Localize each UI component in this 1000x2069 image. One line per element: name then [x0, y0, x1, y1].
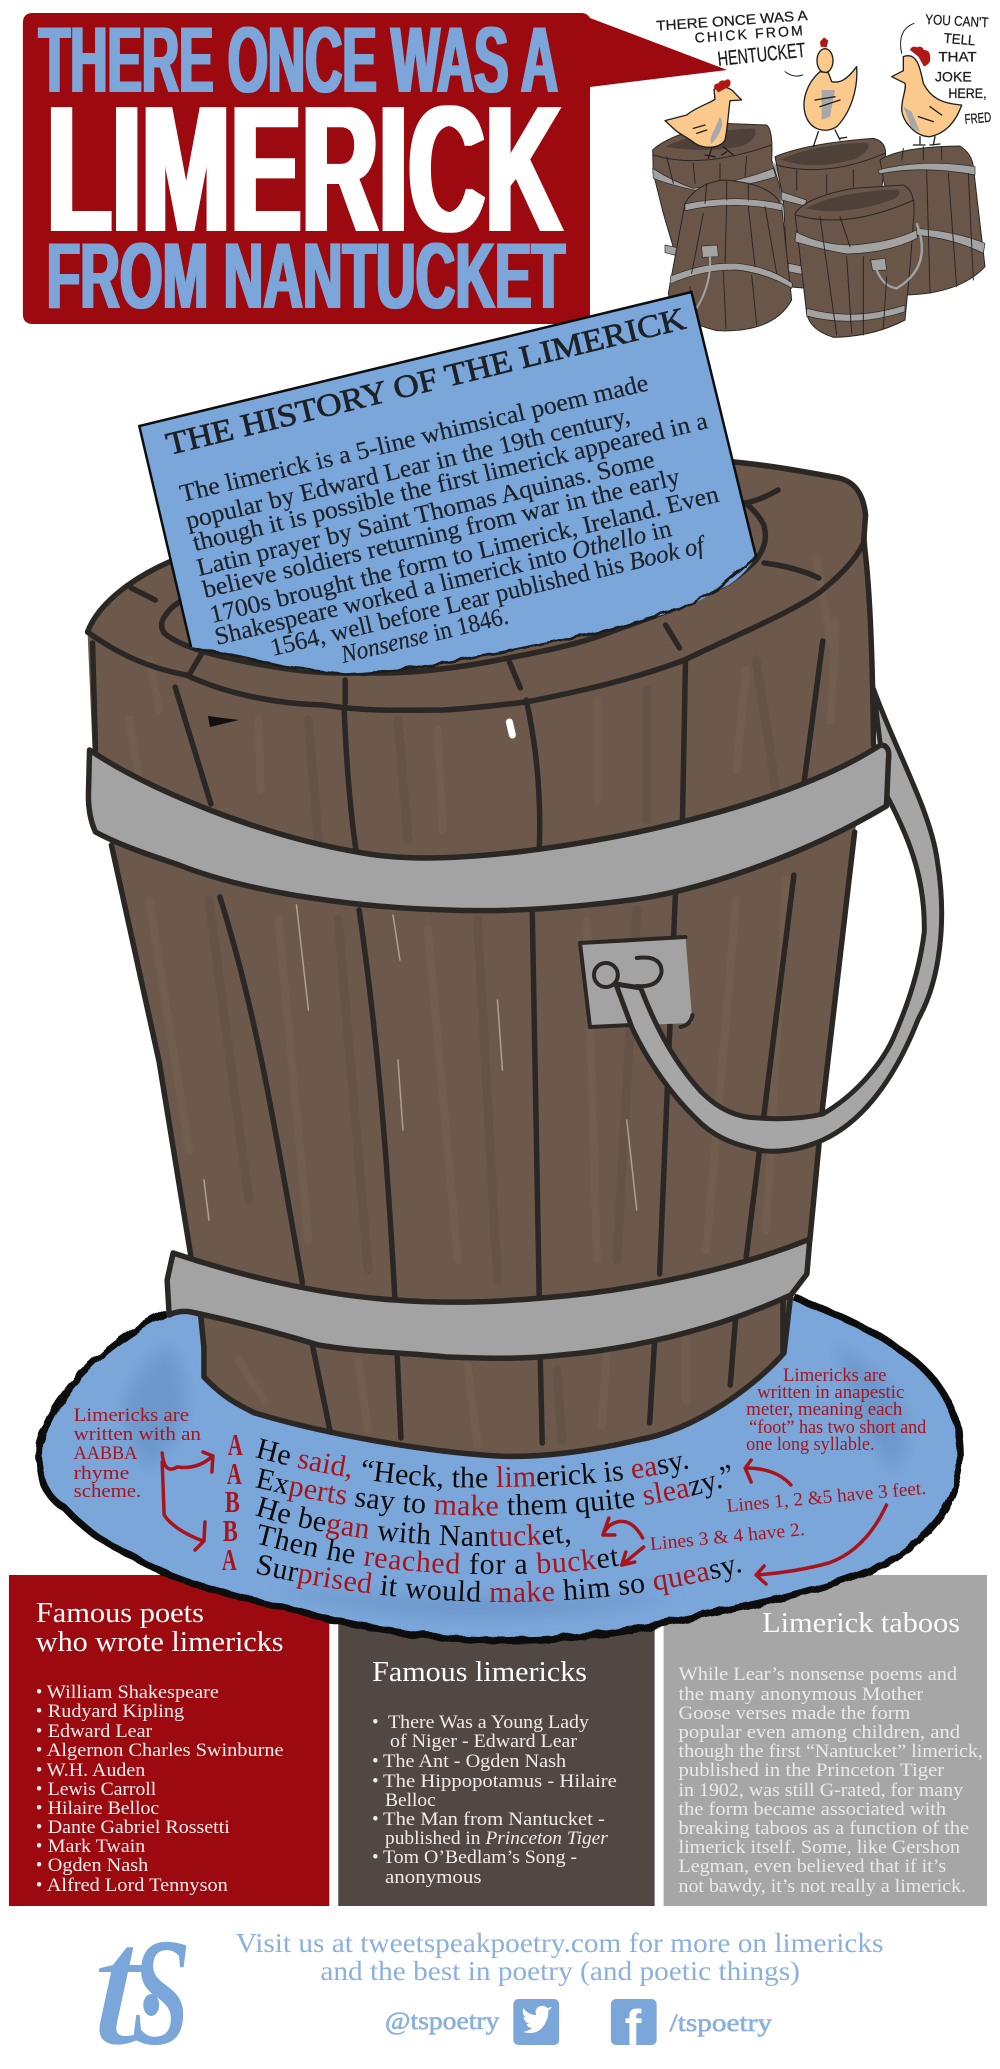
- poet list: Alfred Lord Tennyson: [47, 1875, 228, 1895]
- poem: Experts say to make them quite sleazy.”: [255, 1464, 730, 1518]
- title line 1: THERE ONCE WAS A: [39, 7, 558, 112]
- annotation: rhyme scheme: rhyme: [74, 1463, 129, 1484]
- heading: Limerick taboos: [762, 1608, 960, 1639]
- annotation: rhyme scheme: written with an: [74, 1424, 202, 1445]
- annotation: lines 1, 2 and 5: Lines 1, 2 &5 have 3 feet.: [726, 1478, 927, 1517]
- twitter handle: @tspoetry: [385, 2008, 500, 2035]
- body text: the form became associated with: [679, 1799, 946, 1819]
- facebook handle: /tspoetry: [670, 2010, 773, 2037]
- rhyme scheme letters: A: [222, 1542, 237, 1577]
- body text: Goose verses made the form: [679, 1703, 911, 1723]
- speech: You can't tell that joke here, Fred: HERE,: [948, 85, 987, 101]
- rhyme scheme letters: [222, 1427, 243, 1577]
- speech: There once was a chick from Hentucket: CHICK FROM: [694, 22, 803, 46]
- body text: the many anonymous Mother: [679, 1684, 923, 1704]
- limerick list: Tom O’Bedlam’s Song -: [383, 1847, 577, 1867]
- top band: [88, 745, 889, 911]
- poem: [255, 1438, 741, 1602]
- poet list: •: [36, 1836, 42, 1856]
- arrows: rhyme scheme: [162, 1452, 213, 1550]
- rhyme scheme letters: A: [227, 1456, 242, 1491]
- annotation: rhyme scheme: Limericks are: [74, 1405, 189, 1426]
- poet list: •: [36, 1721, 42, 1741]
- bucket: front left: [668, 180, 793, 331]
- limerick list: •: [372, 1771, 379, 1791]
- limerick list: There Was a Young Lady: [388, 1712, 590, 1732]
- paper body text: [177, 370, 722, 669]
- illustration: chickens on buckets: [653, 7, 992, 337]
- poet list: •: [36, 1779, 42, 1799]
- title line 2: LIMERICK: [47, 69, 562, 270]
- body text: published in the Princeton Tiger: [679, 1760, 944, 1780]
- limerick list: The Ant - Ogden Nash: [383, 1751, 566, 1771]
- limerick list: The Hippopotamus - Hilaire: [383, 1771, 617, 1791]
- body text: not bawdy, it’s not really a limerick.: [679, 1876, 966, 1896]
- limerick list: •: [372, 1809, 379, 1829]
- limerick list: •: [372, 1712, 379, 1732]
- speech: There once was a chick from Hentucket: [656, 7, 809, 76]
- heading: Famous poets: [36, 1598, 204, 1629]
- annotation: anapestic meter: “foot” has two short and: [749, 1417, 927, 1438]
- paper body text: The limerick is a 5-line whimsical poem made: [177, 370, 651, 508]
- annotation: anapestic meter: Limericks are: [783, 1365, 886, 1386]
- poem: He began with Nantucket,: [255, 1496, 570, 1548]
- panel: limerick taboos: [664, 1575, 987, 1906]
- icon: facebook: [611, 1999, 657, 2056]
- rhyme scheme letters: B: [225, 1484, 240, 1519]
- poet list: •: [36, 1682, 42, 1702]
- poet list: •: [36, 1701, 42, 1721]
- annotation: rhyme scheme: [74, 1405, 202, 1502]
- panel: famous poets: [9, 1575, 329, 1906]
- title speech bubble: [23, 7, 727, 328]
- bucket outline: [93, 540, 874, 1456]
- body text: popular even among children, and: [679, 1722, 960, 1742]
- poet list: Mark Twain: [48, 1836, 145, 1856]
- bucket: back left: [653, 123, 787, 270]
- paper body text: Nonsense in 1846.: [337, 603, 511, 669]
- speech: You can't tell that joke here, Fred: THAT: [938, 48, 977, 64]
- annotation: rhyme scheme: scheme.: [74, 1481, 141, 1502]
- annotation: anapestic meter: meter, meaning each: [746, 1399, 903, 1420]
- wood streaks: [129, 560, 836, 1445]
- poet list: William Shakespeare: [47, 1682, 219, 1702]
- limerick list: of Niger - Edward Lear: [390, 1731, 577, 1751]
- chicken: middle: [804, 37, 857, 147]
- limerick list: Belloc: [385, 1790, 436, 1810]
- footer message: and the best in poetry (and poetic things): [320, 1956, 800, 1986]
- poem: Surprised it would make him so queasy.: [256, 1555, 741, 1602]
- heading: [36, 1598, 284, 1658]
- bucket: front right: [795, 185, 922, 337]
- speech: You can't tell that joke here, Fred: YOU CAN'T: [925, 11, 989, 30]
- paper body text: 1564, well before Lear published his Book of: [268, 531, 710, 662]
- arrows: meter: [603, 1460, 886, 1584]
- icon: facebook: f: [625, 2000, 642, 2056]
- speech: You can't tell that joke here, Fred: JOKE: [935, 69, 972, 85]
- speech: You can't tell that joke here, Fred: TELL: [943, 30, 976, 48]
- panel: famous limericks: [338, 1610, 655, 1906]
- poet list: [36, 1682, 284, 1895]
- footer message: [236, 1928, 883, 1986]
- paper heading: THE HISTORY OF THE LIMERICK: [163, 301, 689, 462]
- limerick list: The Man from Nantucket -: [383, 1809, 605, 1829]
- limerick list: anonymous: [385, 1867, 482, 1887]
- heading: who wrote limericks: [36, 1627, 284, 1658]
- small nail mark: [208, 716, 239, 727]
- limerick list: published in Princeton Tiger: [385, 1828, 609, 1848]
- annotation: anapestic meter: written in anapestic: [757, 1382, 904, 1403]
- body text: [679, 1664, 983, 1896]
- title line 3: FROM NANTUCKET: [47, 223, 565, 328]
- poem: He said, “Heck, the limerick is easy.: [256, 1438, 688, 1492]
- big bucket: [88, 450, 942, 1456]
- poet list: Edward Lear: [48, 1721, 152, 1741]
- poet list: Lewis Carroll: [48, 1779, 156, 1799]
- footer message: Visit us at tweetspeakpoetry.com for more on limericks: [236, 1928, 883, 1958]
- annotation: rhyme scheme: AABBA: [74, 1443, 138, 1464]
- poet list: Dante Gabriel Rossetti: [48, 1817, 230, 1837]
- blue puddle: [39, 1280, 960, 1640]
- speech: There once was a chick from Hentucket: HENTUCKET: [716, 39, 807, 71]
- poet list: Rudyard Kipling: [48, 1701, 184, 1721]
- poet list: W.H. Auden: [47, 1760, 145, 1780]
- footer: ts logo: [90, 1853, 191, 2069]
- body text: Legman, even believed that if it’s: [679, 1856, 946, 1876]
- body text: in 1902, was still G-rated, for many: [679, 1780, 964, 1800]
- bucket: back middle: [775, 138, 886, 288]
- speech: You can't tell that joke here, Fred: [901, 11, 992, 127]
- heading: Famous limericks: [372, 1657, 587, 1688]
- limerick list: •: [372, 1847, 379, 1867]
- handle plate: [580, 937, 692, 1027]
- bucket rim: [88, 462, 866, 710]
- paper body text: believe soldiers returning from war in the early: [200, 463, 683, 604]
- poet list: •: [36, 1875, 42, 1895]
- poet list: •: [36, 1855, 42, 1875]
- body text: limerick itself. Some, like Gershon: [679, 1837, 960, 1857]
- rhyme scheme letters: A: [228, 1427, 243, 1462]
- stave lines: [175, 641, 823, 1443]
- rhyme scheme letters: B: [223, 1513, 238, 1548]
- poet list: •: [36, 1817, 42, 1837]
- annotation: anapestic meter: one long syllable.: [746, 1434, 875, 1455]
- speech: There once was a chick from Hentucket: THERE ONCE WAS A: [656, 7, 809, 34]
- chicken: left: [665, 79, 742, 158]
- paper body text: popular by Edward Lear in the 19th century,: [183, 402, 633, 535]
- poet list: •: [36, 1760, 42, 1780]
- paper body text: 1700s brought the form to Limerick, Ireland. Even: [207, 481, 722, 629]
- body text: breaking taboos as a function of the: [679, 1818, 969, 1838]
- limerick list: [372, 1712, 617, 1887]
- annotation: lines 3 and 4: Lines 3 & 4 have 2.: [649, 1519, 806, 1555]
- paper body text: Shakespeare worked a limerick into Othello in: [212, 515, 675, 651]
- chicken: right: [892, 47, 962, 145]
- body text: though the first “Nantucket” limerick,: [679, 1741, 983, 1761]
- annotation: anapestic meter: [746, 1365, 927, 1455]
- paper body text: though it is possible the first limerick appeared in a: [190, 407, 710, 557]
- bucket handle: [616, 689, 942, 1151]
- poet list: Ogden Nash: [48, 1855, 148, 1875]
- limerick list: •: [372, 1751, 379, 1771]
- poet list: •: [36, 1798, 42, 1818]
- poet list: Algernon Charles Swinburne: [47, 1740, 284, 1760]
- bottom band: [167, 1239, 810, 1358]
- history paper: [139, 292, 756, 674]
- body text: While Lear’s nonsense poems and: [679, 1664, 957, 1684]
- poem: Then he reached for a bucket: [258, 1524, 620, 1574]
- paper body text: Latin prayer by Saint Thomas Aquinas. Some: [194, 446, 657, 582]
- poet list: •: [36, 1740, 42, 1760]
- icon: twitter: [513, 1999, 559, 2045]
- bucket body: [88, 450, 874, 1456]
- poet list: Hilaire Belloc: [48, 1798, 159, 1818]
- bucket: back right: [878, 146, 985, 295]
